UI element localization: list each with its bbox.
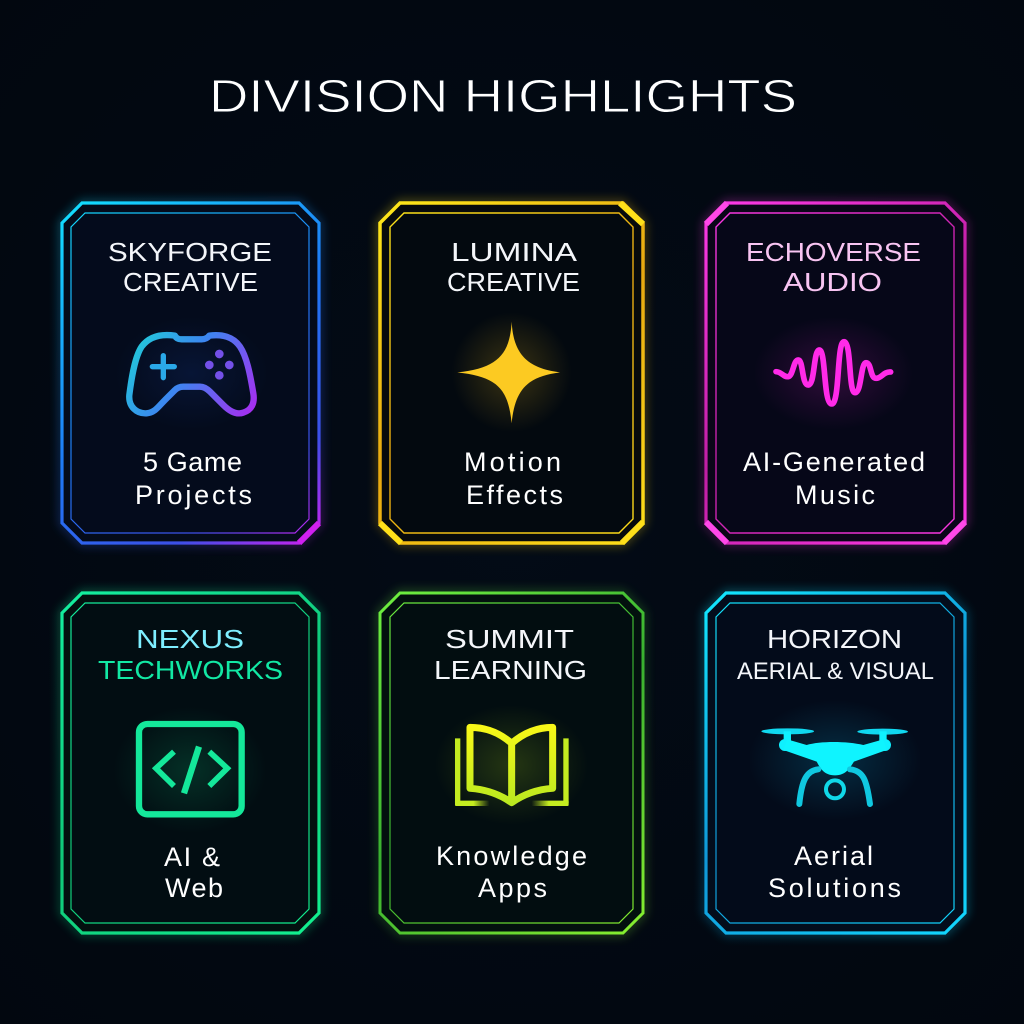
- heading: TECHWORKS: [98, 655, 283, 685]
- panel: Echoverse Audio: [706, 203, 965, 543]
- heading: [98, 624, 283, 685]
- heading: HORIZON: [767, 624, 902, 654]
- description: Projects: [135, 480, 252, 510]
- icon: four-point sparkle: [452, 312, 572, 432]
- description: Effects: [466, 480, 563, 510]
- description: Music: [795, 480, 875, 510]
- heading: CREATIVE: [123, 267, 258, 297]
- icon: open book: [435, 705, 588, 825]
- panel: Lumina Creative: [380, 203, 643, 543]
- panel: Summit Learning: [380, 593, 643, 933]
- panel: Horizon Aerial & Visual: [706, 593, 965, 933]
- description: [743, 447, 925, 510]
- heading: [447, 237, 580, 297]
- heading: AUDIO: [783, 267, 882, 297]
- heading: LUMINA: [451, 237, 578, 267]
- title: DIVISION HIGHLIGHTS: [209, 70, 797, 122]
- icon: sound wave: [753, 317, 913, 430]
- panel: Skyforge Creative: [62, 203, 319, 543]
- heading: [434, 624, 587, 685]
- description: [135, 447, 252, 510]
- description: Apps: [478, 873, 547, 903]
- heading: ECHOVERSE: [746, 237, 921, 267]
- description: 5 Game: [143, 447, 242, 477]
- heading: LEARNING: [434, 655, 587, 685]
- heading: SKYFORGE: [108, 237, 272, 267]
- description: Web: [165, 873, 223, 903]
- icon: code window: [113, 707, 267, 833]
- description: AI &: [164, 842, 220, 872]
- description: Motion: [464, 447, 561, 477]
- description: [768, 841, 901, 903]
- description: AI-Generated: [743, 447, 925, 477]
- heading: SUMMIT: [445, 624, 574, 654]
- description: Knowledge: [436, 841, 587, 871]
- description: Solutions: [768, 873, 901, 903]
- heading: NEXUS: [136, 624, 244, 654]
- heading: [737, 624, 934, 685]
- panel: Nexus Techworks: [62, 593, 319, 933]
- heading: CREATIVE: [447, 267, 580, 297]
- heading: [108, 237, 272, 297]
- description: [164, 842, 223, 903]
- heading: AERIAL & VISUAL: [737, 658, 934, 685]
- heading: [746, 237, 921, 297]
- description: [436, 841, 587, 903]
- description: [464, 447, 563, 510]
- description: Aerial: [794, 841, 873, 871]
- icon: drone: [748, 700, 922, 820]
- icon: game controller: [115, 317, 268, 430]
